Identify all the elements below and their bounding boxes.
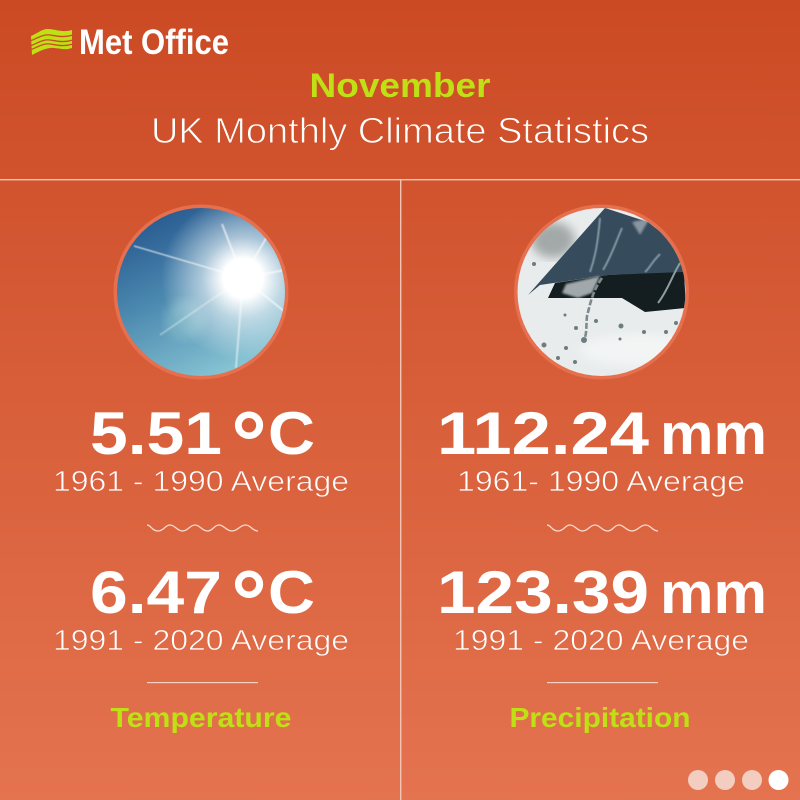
value: 1961-1990 precipitation: mm bbox=[660, 402, 767, 467]
heading: temperature: Temperature bbox=[110, 702, 292, 733]
umbrella canopy bbox=[528, 208, 686, 295]
value: 1991-2020 precipitation bbox=[437, 559, 767, 626]
value: 1961-1990 precipitation: 112.24 bbox=[437, 400, 650, 467]
rule bbox=[547, 682, 658, 683]
wavy divider bbox=[547, 525, 658, 531]
label: 1991-2020 average: 1991 - 2020 Average bbox=[453, 625, 749, 657]
value: 1991-2020 temperature: C bbox=[268, 559, 315, 626]
label: 1961-1990 average: 1961 - 1990 Average bbox=[53, 466, 349, 498]
icon: waves bbox=[30, 29, 73, 55]
logo: Met Office bbox=[30, 23, 229, 62]
label: 1991-2020 average: 1991 - 2020 Average bbox=[53, 625, 349, 657]
panel: precipitation bbox=[437, 204, 767, 733]
value: 1961-1990 temperature: 5.51 bbox=[90, 400, 222, 467]
heading: precipitation: Precipitation bbox=[510, 702, 690, 733]
photo: sun in blue sky bbox=[114, 204, 288, 380]
horizontal divider bbox=[0, 179, 800, 180]
value: 1991-2020 temperature: 6.47 bbox=[90, 559, 222, 626]
umbrella underside bbox=[548, 272, 686, 312]
wordmark: Met Office bbox=[79, 23, 229, 62]
value: 1991-2020 temperature: ° bbox=[231, 553, 267, 653]
vertical divider bbox=[400, 180, 401, 800]
value: 1991-2020 temperature bbox=[90, 553, 315, 653]
title: month: November bbox=[310, 67, 490, 105]
subtitle: UK Monthly Climate Statistics bbox=[151, 110, 649, 151]
value: 1961-1990 temperature bbox=[90, 394, 315, 494]
label: 1961-1990 average: 1961- 1990 Average bbox=[457, 466, 745, 498]
value: 1991-2020 precipitation: 123.39 bbox=[437, 559, 649, 626]
panel: temperature bbox=[53, 204, 349, 733]
value: 1961-1990 temperature: ° bbox=[231, 394, 267, 494]
wavy divider bbox=[147, 525, 258, 531]
value: 1991-2020 precipitation: mm bbox=[660, 561, 767, 626]
value: 1961-1990 precipitation bbox=[437, 400, 767, 467]
value: 1961-1990 temperature: C bbox=[268, 400, 315, 467]
photo: umbrella in rain bbox=[514, 204, 700, 380]
carousel dots bbox=[688, 770, 788, 790]
rule bbox=[147, 682, 258, 683]
